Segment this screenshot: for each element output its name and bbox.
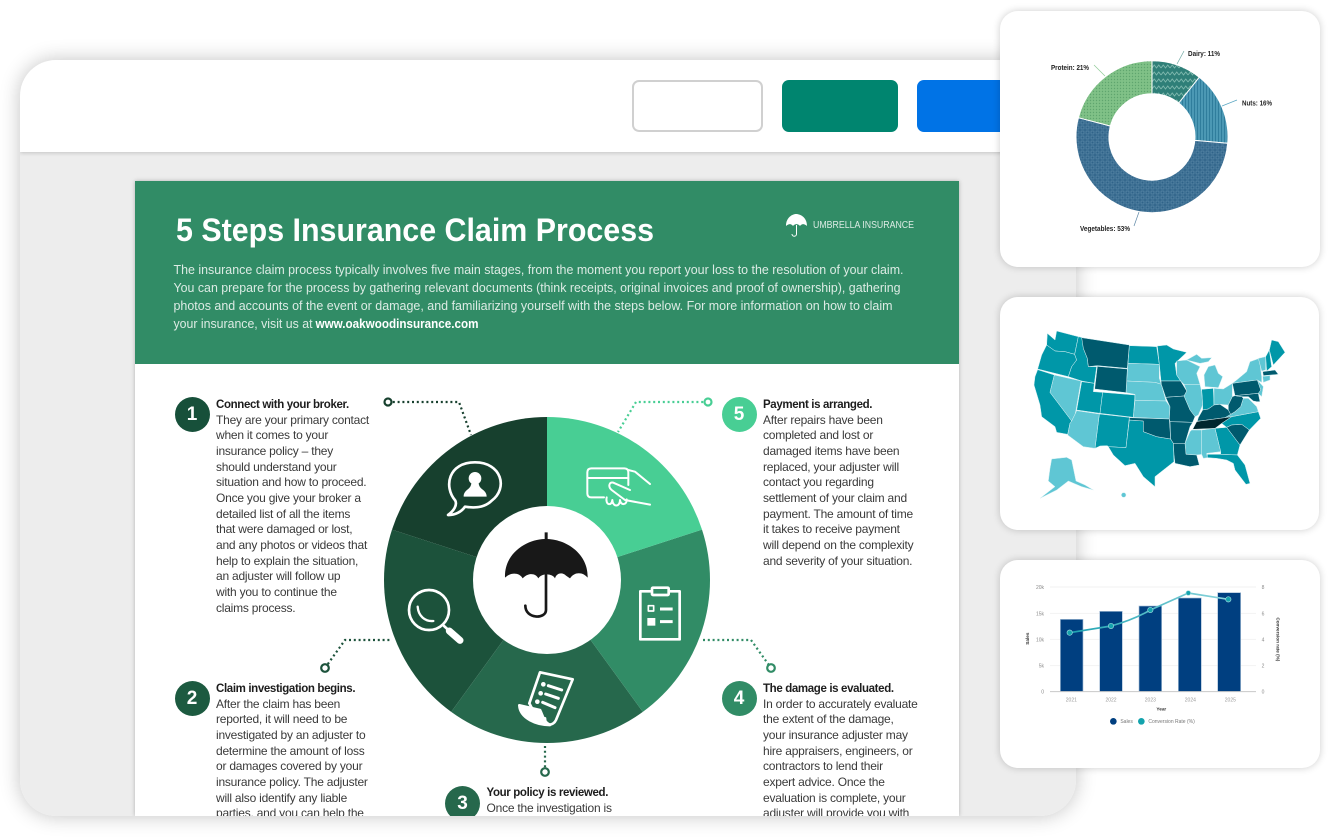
step 2 number: 2 (187, 688, 197, 708)
step 2 number (174, 680, 210, 716)
segment: dairy (1152, 61, 1199, 103)
segment: protein (1078, 61, 1152, 126)
step 1 number (174, 396, 210, 432)
step 3 text: Your policy is reviewed. Once the investigation is (486, 787, 612, 815)
left axis labels (1036, 585, 1044, 696)
dark states (1082, 338, 1278, 467)
donut labels: Nuts: 16% (1242, 98, 1272, 108)
intro paragraph: The insurance claim process typically involves five main stages, from the moment you report your loss to the resolution of your claim. (174, 262, 904, 277)
year labels: 2022 (1105, 697, 1117, 703)
donut segments (1076, 61, 1228, 213)
right axis labels: 0 (1262, 690, 1265, 696)
donut leader lines (1094, 51, 1237, 226)
intro paragraph: You can prepare for the process by gathering relevant documents (think receipts, original invoices and proof of ownership), gathering (174, 280, 900, 295)
connector: step 5 (617, 397, 713, 433)
grid lines (1050, 587, 1256, 666)
process wheel (384, 417, 710, 743)
segment 3 (451, 580, 643, 743)
left axis labels: 15k (1036, 611, 1044, 617)
app window (20, 60, 1076, 816)
left axis labels: 5k (1039, 664, 1044, 670)
intro paragraph (174, 262, 904, 331)
year labels: 2023 (1145, 697, 1156, 703)
connector: step 3 (540, 746, 550, 777)
right axis labels: 2 (1262, 664, 1265, 670)
legend (1110, 718, 1195, 725)
year labels: 2025 (1225, 697, 1236, 703)
heading and intro text (174, 212, 914, 331)
segment: nuts (1179, 77, 1228, 143)
icon: credit card hand (587, 468, 650, 505)
segment 4 (547, 530, 710, 712)
left axis labels: 0 (1041, 690, 1044, 696)
donut labels: Vegetables: 53% (1080, 224, 1130, 233)
step 5 text: Payment is arranged. After repairs have been completed and lost or damaged items have been replaced, your adjuster will contact you regarding settlement of your claim and payment. The amount of time it takes to receive payment will depend on the complexity and severity of your situation. (763, 399, 913, 568)
outline button (632, 80, 763, 132)
toolbar (20, 60, 1076, 152)
step 5 number: 5 (734, 404, 744, 424)
icon: speech bubble person (448, 462, 501, 515)
icon: umbrella (505, 532, 588, 617)
wheel icons (409, 462, 680, 725)
intro paragraph: www.oakwoodinsurance.com (315, 316, 478, 331)
connector: step 1 (383, 397, 472, 436)
connector: step 4 (703, 638, 776, 673)
axis titles: Conversion rate (%) (1276, 617, 1281, 662)
axis line (1050, 690, 1256, 693)
card: donut chart (1000, 11, 1320, 267)
legend: Conversion Rate (%) (1148, 719, 1195, 725)
header band (135, 181, 959, 364)
donut labels: Protein: 21% (1051, 63, 1089, 72)
step 3 number (445, 786, 480, 820)
segment 5 (547, 417, 702, 580)
step 4 number (722, 680, 756, 716)
donut labels: Dairy: 11% (1188, 49, 1220, 58)
icon: receipt scroll (519, 672, 573, 725)
segment 1 (392, 417, 547, 580)
icon: clipboard checklist (640, 588, 680, 639)
choropleth map (1034, 331, 1285, 498)
axis titles: Sales (1025, 632, 1030, 645)
icon: magnifying glass (409, 590, 460, 640)
segment: vegetables (1076, 118, 1228, 213)
axis titles (1025, 617, 1281, 712)
logo text: UMBRELLA INSURANCE (813, 219, 914, 231)
intro paragraph: photos and accounts of the event or damage, and familiarizing yourself with the steps below. For more information on how to claim (174, 298, 892, 313)
title: 5 Steps Insurance Claim Process (176, 212, 654, 248)
mid states (1034, 331, 1285, 487)
connector: step 2 (320, 638, 390, 673)
conversion line (1067, 591, 1231, 635)
donut labels (1051, 49, 1272, 233)
step 1 text: Connect with your broker. They are your primary contact when it comes to your insurance policy – they should understand your situation and how to proceed. Once you give your broker a detailed list of all the items that were damaged or lost, and any photos or videos that help to explain the situation, an adjuster will follow up with you to continue the claims process. (216, 399, 369, 615)
axis titles: Year (1156, 707, 1166, 712)
infographic sheet (135, 181, 959, 816)
left axis labels: 20k (1036, 585, 1044, 591)
step 1 number: 1 (187, 404, 197, 424)
teal button (782, 80, 898, 132)
segment 2 (384, 530, 547, 712)
intro paragraph: your insurance, visit us at (174, 316, 313, 331)
year labels: 2021 (1066, 697, 1077, 703)
window shadow (20, 60, 1076, 816)
step 4 number: 4 (734, 688, 744, 708)
darkest state (1193, 417, 1232, 429)
right axis labels: 8 (1262, 585, 1265, 591)
year labels: 2024 (1185, 697, 1196, 703)
right axis labels: 6 (1262, 611, 1265, 617)
blue button (917, 80, 1033, 132)
step 3 number: 3 (457, 792, 468, 814)
centre disc (473, 506, 621, 654)
year labels (1066, 697, 1236, 703)
card: US map (1000, 297, 1319, 530)
legend: Sales (1120, 719, 1133, 725)
right axis labels: 4 (1262, 637, 1265, 643)
sales bars (1060, 593, 1241, 692)
left axis labels: 10k (1036, 637, 1044, 643)
card: combo chart (1000, 560, 1320, 768)
icon: logo umbrella (786, 214, 807, 236)
right axis labels (1262, 585, 1265, 696)
light states (1040, 354, 1270, 498)
step 5 number (722, 396, 756, 432)
